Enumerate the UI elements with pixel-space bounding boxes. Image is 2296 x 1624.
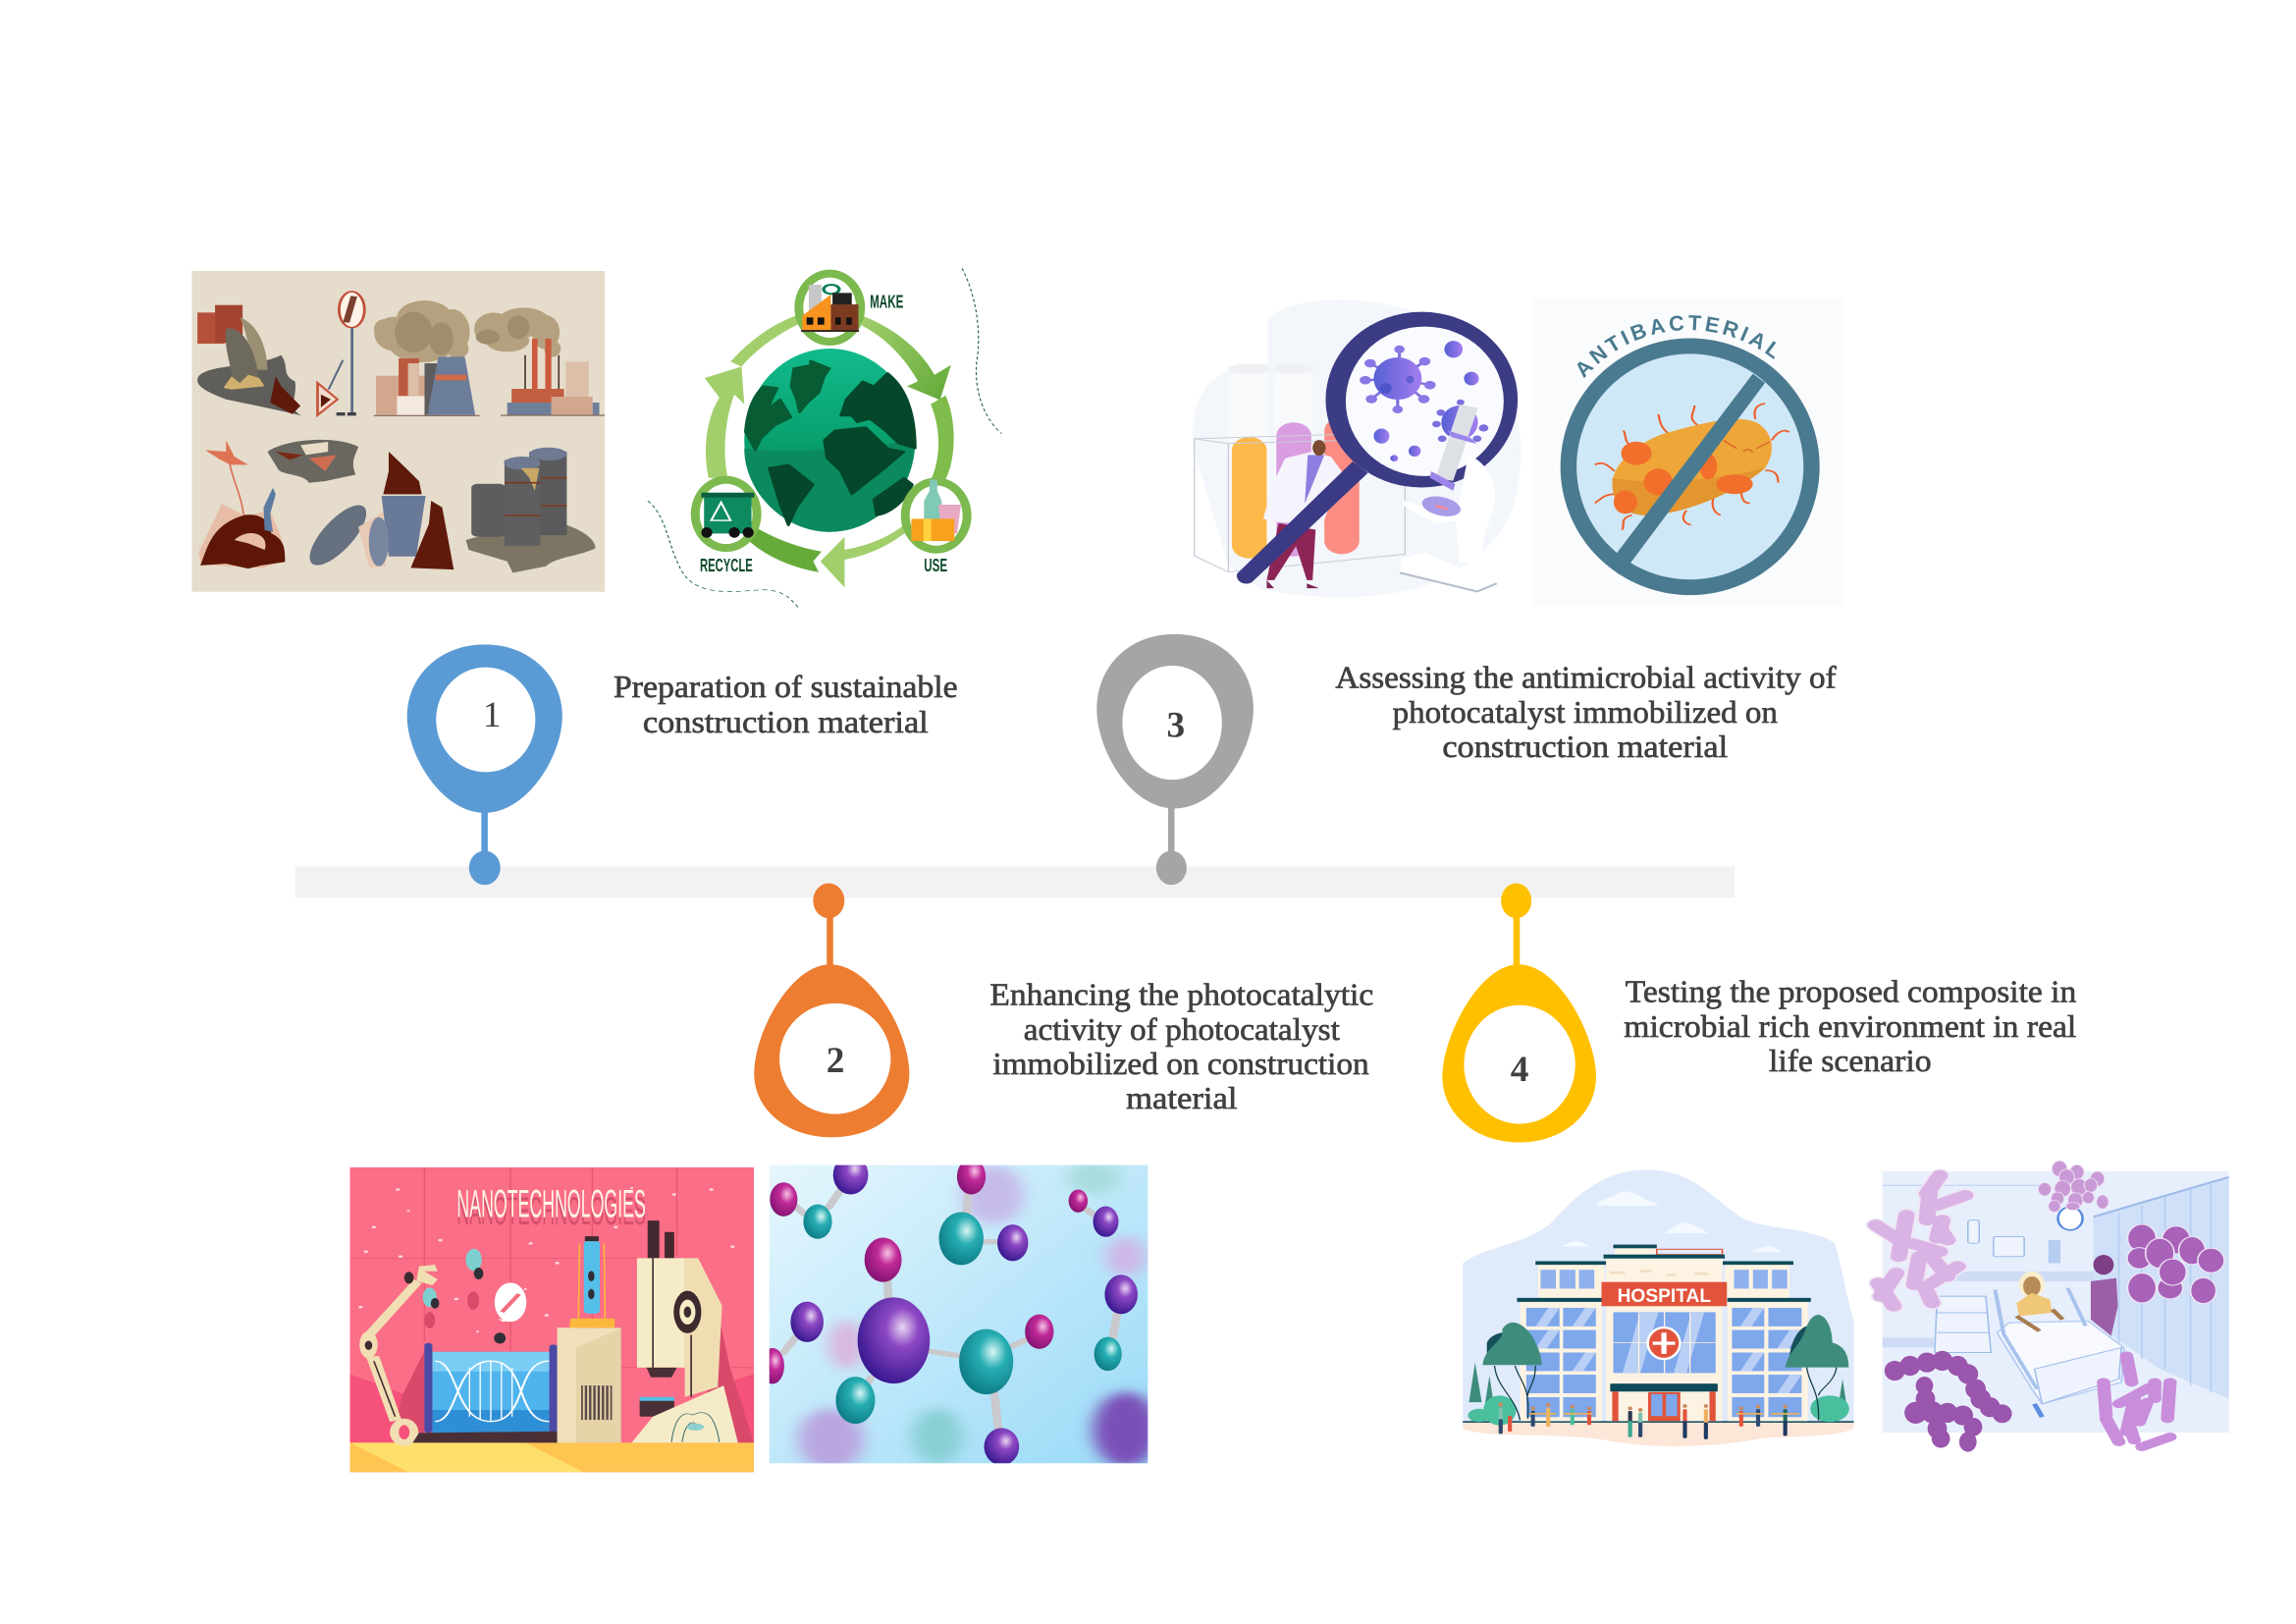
panel: pollution illustration bbox=[191, 271, 605, 592]
people bbox=[1501, 1404, 1786, 1437]
panel: molecule illustration bbox=[761, 1156, 1159, 1471]
panel: hospital illustration bbox=[1463, 1169, 1854, 1446]
benches bbox=[1529, 1411, 1799, 1416]
hospital sign text: HOSPITAL bbox=[1618, 1285, 1711, 1307]
dna tank bbox=[412, 1332, 569, 1442]
milestone 1 bbox=[407, 644, 958, 885]
icon: microscope bbox=[1400, 405, 1497, 592]
infographic canvas bbox=[192, 268, 2230, 1473]
step 2 text: immobilized on construction bbox=[992, 1046, 1369, 1081]
step 1 text: Preparation of sustainable bbox=[614, 669, 958, 704]
pin 3 marker bbox=[1096, 634, 1254, 885]
label: recycle: RECYCLE bbox=[700, 555, 753, 575]
icon: wrench bubble bbox=[495, 1282, 526, 1322]
panel: circular economy cycle bbox=[648, 268, 1002, 609]
robot arm bbox=[359, 1265, 438, 1446]
panel: nanotechnologies illustration: NANOTECHNOLOGIES bbox=[456, 1189, 646, 1233]
step 4 text: life scenario bbox=[1769, 1043, 1932, 1078]
nano drones bbox=[423, 1249, 483, 1328]
arc label: antibacterial bbox=[1584, 330, 1795, 380]
panel: nanotechnologies illustration: NANOTECHNOLOGIES bbox=[456, 1182, 646, 1226]
floor bbox=[350, 1442, 754, 1472]
instrument tower bbox=[558, 1236, 621, 1442]
molecule atoms bbox=[761, 1156, 1138, 1465]
icon: make factory bbox=[794, 270, 865, 346]
icon: bacterium bbox=[1595, 404, 1789, 530]
step 4 text: Testing the proposed composite in bbox=[1626, 973, 2076, 1008]
icon: use products bbox=[901, 477, 972, 554]
milestone 3 bbox=[1096, 634, 1837, 885]
milestone 2 bbox=[754, 883, 1373, 1137]
pin 3 marker: 3 bbox=[1167, 705, 1185, 745]
globe bbox=[744, 349, 915, 532]
panel: nanotechnologies illustration bbox=[350, 1167, 754, 1472]
building bbox=[1517, 1245, 1811, 1421]
step 3 text bbox=[1335, 659, 1837, 764]
step 2 text: activity of photocatalyst bbox=[1024, 1011, 1340, 1047]
smoke plume bbox=[374, 300, 561, 362]
timeline bar bbox=[295, 866, 1735, 897]
cycle arrows bbox=[705, 314, 954, 587]
step 3 text: photocatalyst immobilized on bbox=[1393, 694, 1778, 730]
step 3 text: construction material bbox=[1442, 729, 1728, 764]
nurse bbox=[2091, 1255, 2118, 1336]
label: use: USE bbox=[924, 555, 947, 575]
panel: microbes under magnifier bbox=[1193, 299, 1521, 597]
trees bbox=[1468, 1315, 1849, 1426]
step 3 text: Assessing the antimicrobial activity of bbox=[1335, 659, 1837, 694]
step 4 text bbox=[1624, 973, 2076, 1078]
panel: antibacterial badge bbox=[1561, 315, 1820, 595]
step 2 text bbox=[989, 976, 1373, 1115]
patient bbox=[2016, 1272, 2062, 1331]
step 2 text: material bbox=[1126, 1080, 1238, 1115]
step 2 text: Enhancing the photocatalytic bbox=[989, 976, 1373, 1011]
panel: hospital room with microbes bbox=[1876, 1161, 2229, 1452]
step 4 text: microbial rich environment in real bbox=[1624, 1008, 2076, 1044]
microscope machine bbox=[631, 1220, 738, 1442]
pin 2 marker: 2 bbox=[827, 1041, 844, 1081]
pin 4 marker bbox=[1442, 883, 1596, 1143]
step 1 text bbox=[614, 669, 958, 739]
icon: recycle bin bbox=[691, 476, 762, 552]
hospital bed bbox=[1995, 1288, 2124, 1417]
milestone 4 bbox=[1442, 883, 2076, 1143]
icon: virus bbox=[1360, 346, 1436, 413]
pin 2 marker bbox=[754, 883, 909, 1137]
microbes bbox=[1876, 1161, 2224, 1452]
panel: antibacterial badge: ANTIBACTERIAL bbox=[1576, 315, 1777, 379]
label: make: MAKE bbox=[870, 291, 903, 311]
pin 4 marker: 4 bbox=[1511, 1050, 1528, 1090]
step 1 text: construction material bbox=[643, 704, 929, 739]
pin 1 marker: 1 bbox=[483, 695, 502, 735]
stairs bbox=[1935, 1296, 1991, 1352]
pin 1 marker bbox=[407, 644, 562, 885]
nanotechnologies title bbox=[456, 1182, 646, 1233]
